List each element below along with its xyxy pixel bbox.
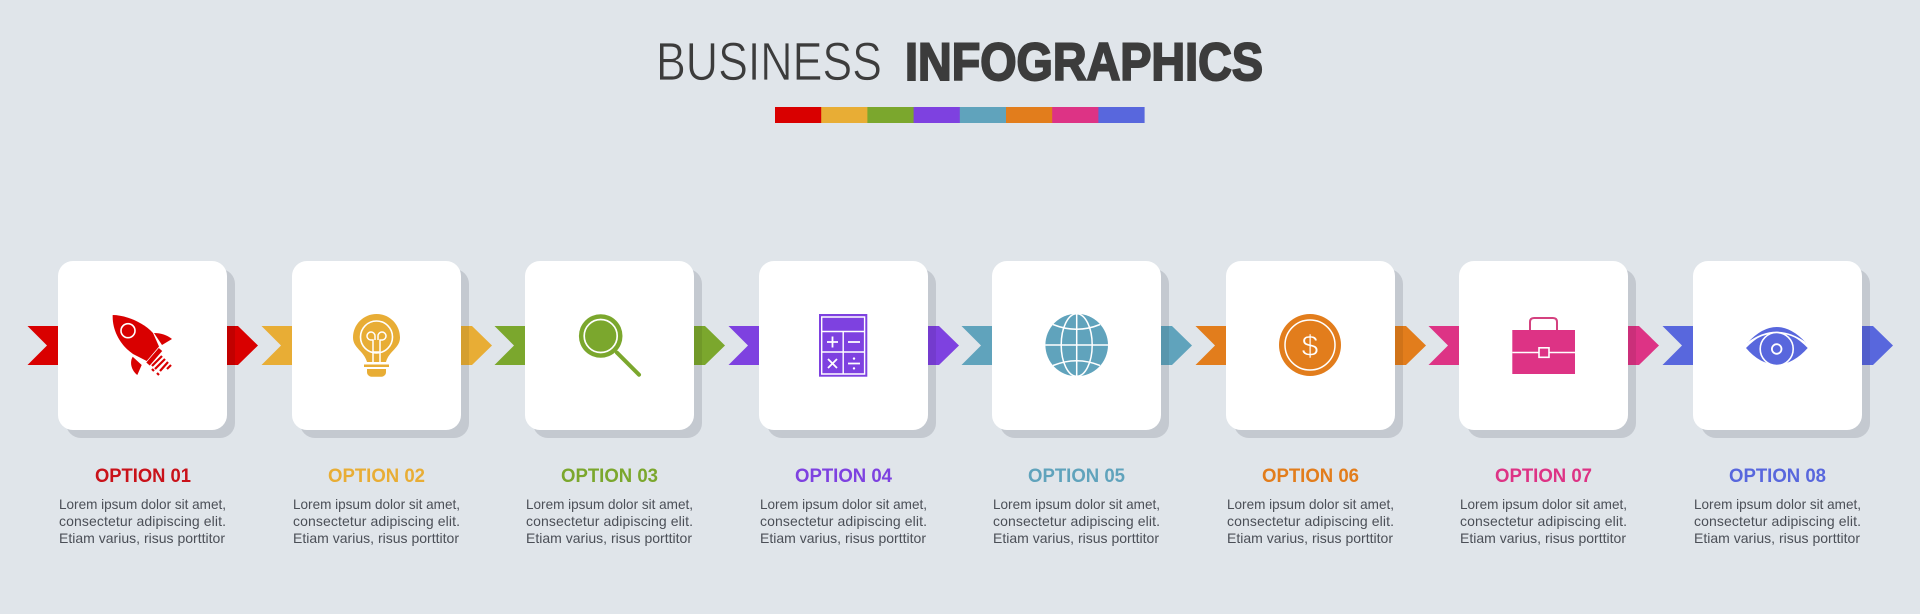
label: OPTION 06 — [1262, 466, 1359, 487]
description: consectetur adipiscing elit. — [293, 513, 460, 529]
description: consectetur adipiscing elit. — [526, 513, 693, 529]
icon: rocket — [113, 315, 172, 375]
description: Etiam varius, risus porttitor — [59, 530, 225, 546]
description: Lorem ipsum dolor sit amet, — [1460, 496, 1627, 512]
label: OPTION 01 — [95, 466, 191, 487]
panel: option 07 — [1428, 261, 1659, 546]
description — [1227, 496, 1394, 546]
description — [526, 496, 693, 546]
description: Etiam varius, risus porttitor — [993, 530, 1159, 546]
panel: option 04 — [728, 261, 959, 546]
panel: option 01 — [28, 261, 258, 546]
title: INFOGRAPHICS — [905, 33, 1263, 92]
description: Lorem ipsum dolor sit amet, — [1694, 496, 1861, 512]
icon: calculator — [819, 314, 867, 377]
description: Etiam varius, risus porttitor — [1694, 530, 1860, 546]
panel: option 05 — [962, 261, 1192, 546]
icon: magnifying glass — [579, 314, 639, 375]
description: consectetur adipiscing elit. — [1694, 513, 1861, 529]
label: OPTION 03 — [561, 466, 658, 487]
colour bar — [775, 107, 1145, 123]
icon: eye — [1746, 328, 1808, 366]
panel: option 08 — [1662, 261, 1893, 546]
card — [1693, 261, 1862, 430]
card — [292, 261, 461, 430]
card shadow and arrow — [962, 269, 1192, 438]
description: Etiam varius, risus porttitor — [1460, 530, 1626, 546]
icon: dollar coin: $ — [1302, 330, 1319, 363]
description — [760, 496, 927, 546]
icon: globe — [1045, 314, 1108, 376]
panel: option 03 — [494, 261, 725, 546]
panel: option 02 — [262, 261, 492, 546]
card — [1459, 261, 1628, 430]
card — [759, 261, 928, 430]
description: Lorem ipsum dolor sit amet, — [59, 496, 226, 512]
card — [992, 261, 1161, 430]
description — [993, 496, 1160, 546]
description: Lorem ipsum dolor sit amet, — [293, 496, 460, 512]
description: consectetur adipiscing elit. — [993, 513, 1160, 529]
card shadow and arrow — [1196, 269, 1426, 438]
description: consectetur adipiscing elit. — [1227, 513, 1394, 529]
card — [58, 261, 227, 430]
card shadow and arrow — [728, 269, 959, 438]
description: Lorem ipsum dolor sit amet, — [760, 496, 927, 512]
description — [1694, 496, 1861, 546]
icon: briefcase — [1512, 318, 1575, 374]
panel: option 06 — [1196, 261, 1426, 546]
description — [59, 496, 226, 546]
card shadow and arrow — [28, 269, 258, 438]
card — [1226, 261, 1395, 430]
description: Lorem ipsum dolor sit amet, — [993, 496, 1160, 512]
label: OPTION 08 — [1729, 466, 1826, 487]
label: OPTION 02 — [328, 466, 425, 487]
card — [525, 261, 694, 430]
description: Etiam varius, risus porttitor — [293, 530, 459, 546]
description: consectetur adipiscing elit. — [1460, 513, 1627, 529]
description: Lorem ipsum dolor sit amet, — [526, 496, 693, 512]
icon: light bulb — [353, 314, 400, 377]
label: OPTION 05 — [1028, 466, 1125, 487]
card shadow and arrow — [1662, 269, 1893, 438]
description: Etiam varius, risus porttitor — [1227, 530, 1393, 546]
icon: dollar coin — [1279, 314, 1341, 376]
label: OPTION 07 — [1495, 466, 1592, 487]
description: consectetur adipiscing elit. — [59, 513, 226, 529]
description — [293, 496, 460, 546]
description: consectetur adipiscing elit. — [760, 513, 927, 529]
title — [656, 32, 1263, 92]
label: OPTION 04 — [795, 466, 892, 487]
description: Etiam varius, risus porttitor — [526, 530, 692, 546]
card shadow and arrow — [262, 269, 492, 438]
description — [1460, 496, 1627, 546]
card shadow and arrow — [494, 269, 725, 438]
title: BUSINESS — [656, 32, 882, 92]
card shadow and arrow — [1428, 269, 1659, 438]
description: Lorem ipsum dolor sit amet, — [1227, 496, 1394, 512]
description: Etiam varius, risus porttitor — [760, 530, 926, 546]
